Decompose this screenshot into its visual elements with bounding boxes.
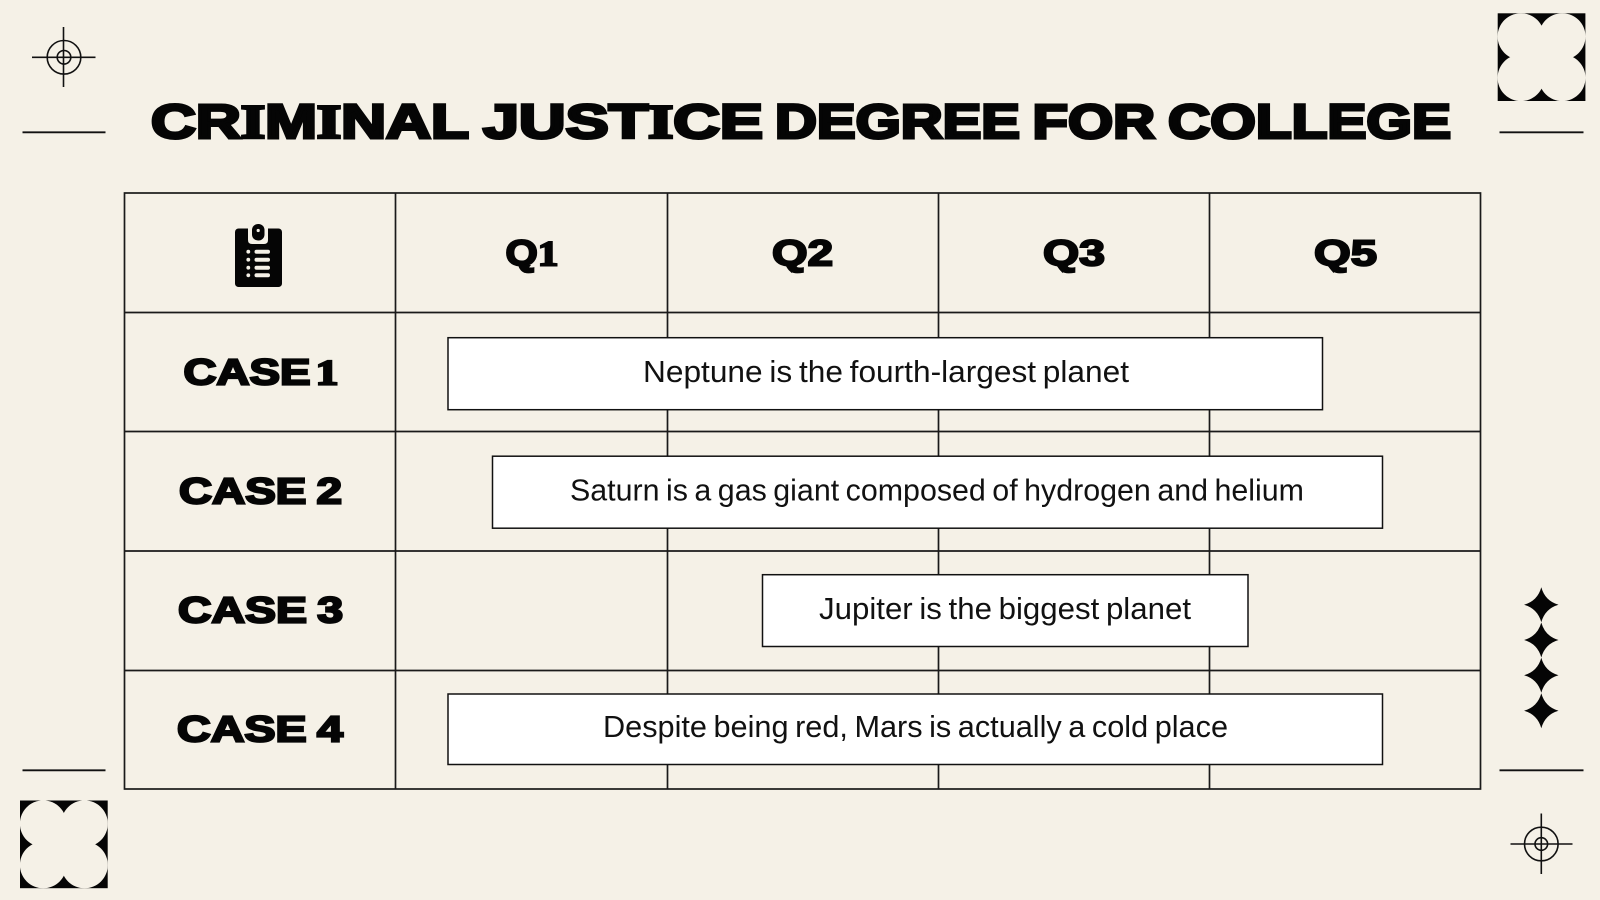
icon: clover square bottom left [20,800,108,888]
bar: case 3 [762,575,1248,646]
title: CR IMINAL [151,96,469,149]
icon: clipboard checklist [235,224,282,287]
label case 2: CASE 2 [179,470,342,512]
bar: case 1 [448,338,1322,410]
table grid [124,193,1480,789]
bar: case 2 [492,456,1382,528]
title: COLLEGE [1168,96,1451,149]
title [151,96,1451,149]
bar: case 3: Jupiter is the biggest planet [819,591,1191,626]
label case 3: CASE 3 [178,590,343,630]
side rules [22,132,1584,770]
icon: four stars column [1524,587,1558,728]
column headers [506,232,1377,274]
bar: case 4 [448,694,1382,764]
title: DEGREE [775,96,1020,149]
bar: case 1: Neptune is the fourth-largest planet [643,354,1129,389]
header Q3: Q3 [1043,232,1105,274]
icon: crosshair bottom right [1510,814,1572,874]
header Q2: Q2 [772,232,833,274]
title: FOR [1032,96,1155,149]
icon: clover square top right [1498,13,1585,101]
label case 1: CASE 1 [184,352,338,392]
title: JUST ICE [483,96,763,149]
label case 4: CASE 4 [177,708,343,750]
header Q1: Q1 [506,232,558,274]
header Q5: Q5 [1314,232,1377,274]
bar: case 4: Despite being red, Mars is actually a cold place [603,709,1228,744]
icon: crosshair top left [32,27,96,87]
row labels [177,352,343,750]
bar: case 2: Saturn is a gas giant composed of hydrogen and helium [570,472,1304,508]
